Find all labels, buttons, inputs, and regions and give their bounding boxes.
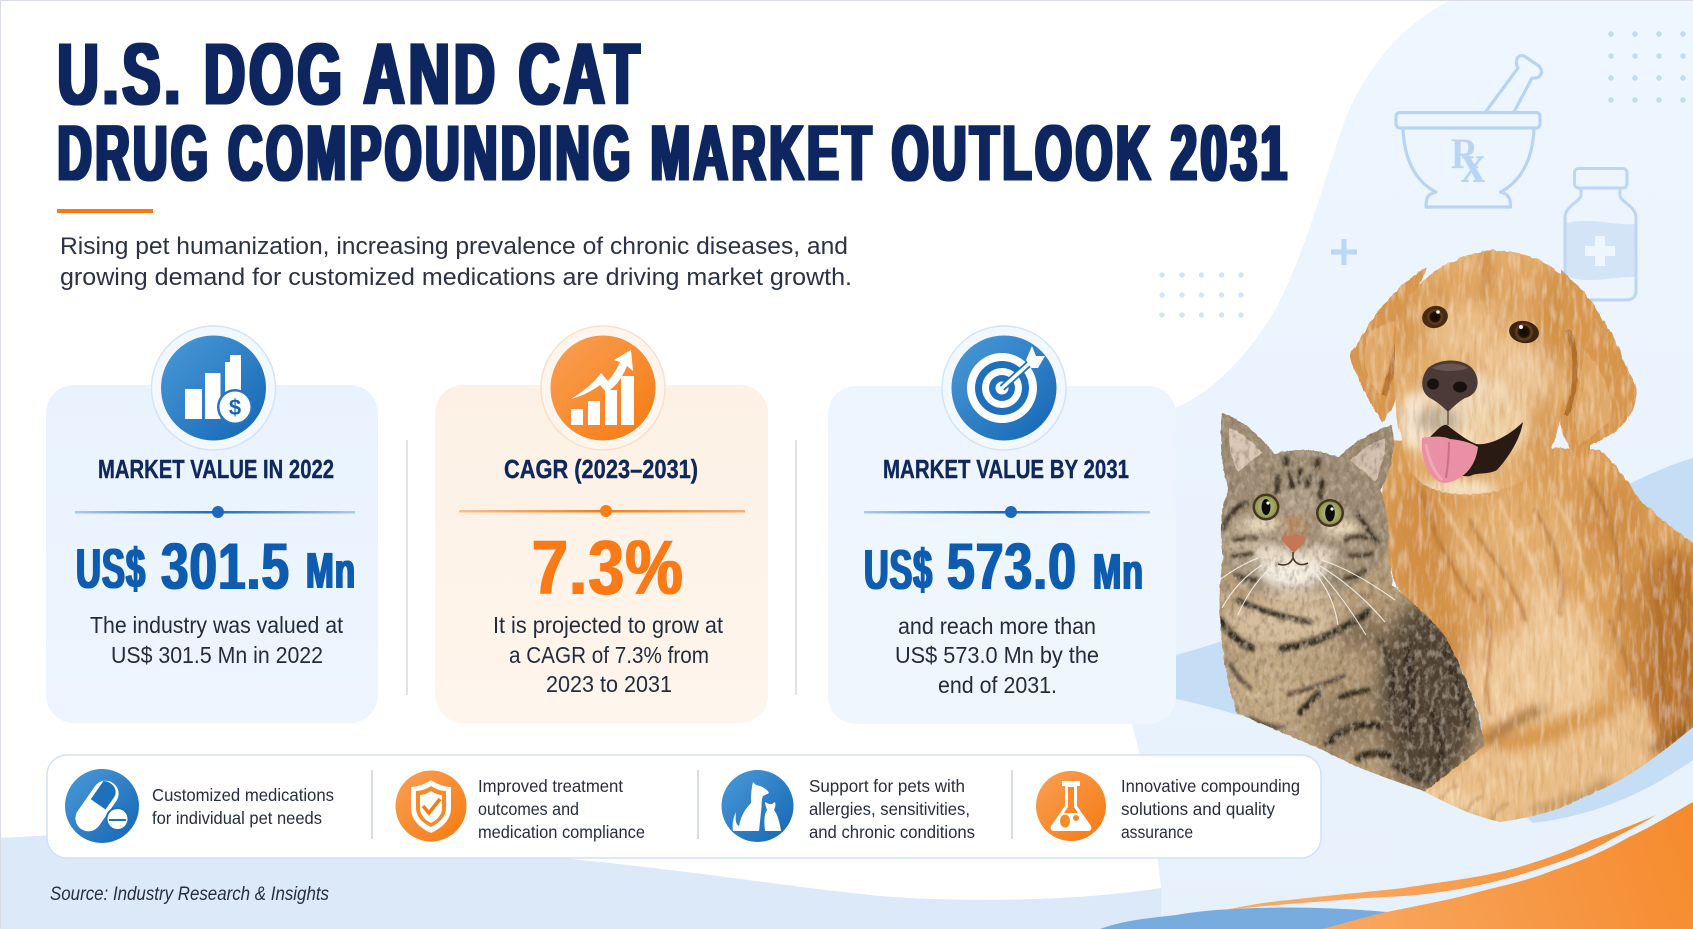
value [864, 529, 1144, 603]
cat face [1205, 494, 1395, 635]
subtitle: growing demand for customized medications are driving market growth. [60, 264, 852, 291]
value: 301.5 [161, 529, 290, 603]
icon: bar chart with dollar coin: $ [229, 395, 241, 420]
dot grid top right [1608, 31, 1686, 103]
dog face [1420, 303, 1541, 483]
value: US$ [864, 538, 933, 602]
icon: medicine bottle [1565, 168, 1636, 300]
divider with dot [459, 505, 745, 517]
benefit: improved outcomes [396, 770, 645, 842]
description: 2023 to 2031 [546, 671, 672, 697]
description: end of 2031. [938, 672, 1057, 698]
panel: CAGR [435, 326, 768, 723]
benefit: customized medications [65, 769, 334, 843]
icon: plus [1331, 239, 1357, 265]
text: medication compliance [478, 822, 645, 842]
text: Innovative compounding [1121, 776, 1300, 796]
title: U.S. DOG AND CAT [58, 26, 644, 123]
heading: MARKET VALUE BY 2031 [883, 454, 1129, 484]
cat ears [1221, 413, 1394, 495]
panel: market value by 2031 [828, 326, 1176, 724]
heading: CAGR (2023–2031) [504, 454, 698, 484]
benefit: innovative compounding [1036, 771, 1300, 842]
text: outcomes and [478, 799, 579, 819]
description: US$ 301.5 Mn in 2022 [111, 642, 323, 668]
dog [1350, 245, 1693, 850]
text: solutions and quality [1121, 799, 1275, 819]
dot grid middle [1159, 272, 1244, 318]
text: Improved treatment [478, 776, 623, 796]
dog right ear [1560, 270, 1637, 458]
dog left ear [1350, 267, 1427, 423]
text [152, 785, 334, 828]
panel: market value in 2022 [46, 326, 378, 723]
icon: target with arrow [942, 326, 1066, 450]
value: Mn [1093, 543, 1144, 600]
divider with dot [75, 506, 355, 518]
icon: shield with check [396, 770, 466, 842]
icon: dog and cat silhouette [722, 770, 794, 842]
icon: flask [1036, 771, 1106, 841]
title [58, 26, 1290, 197]
description [493, 612, 724, 697]
cat body [1219, 542, 1484, 792]
text: for individual pet needs [152, 808, 322, 828]
text [809, 776, 975, 842]
text: and chronic conditions [809, 822, 975, 842]
source note: Source: Industry Research & Insights [50, 884, 329, 905]
dog body [1382, 439, 1693, 822]
text: Customized medications [152, 785, 334, 805]
description: a CAGR of 7.3% from [509, 642, 709, 668]
cat [1205, 413, 1500, 810]
icon: bar chart with dollar coin [152, 326, 276, 450]
panel: benefits bar [47, 755, 1321, 858]
orange accent rule [57, 209, 153, 213]
text: allergies, sensitivities, [809, 799, 970, 819]
subtitle [60, 233, 852, 291]
description [895, 613, 1099, 698]
text [1121, 776, 1300, 842]
icon: mortar and pestle with Rx [1396, 56, 1541, 207]
description: The industry was valued at [90, 612, 344, 638]
icon: mortar and pestle with Rx: R [1451, 131, 1479, 178]
value: 7.3% [532, 525, 684, 611]
value: US$ [76, 537, 146, 601]
cat head [1220, 450, 1390, 603]
value: 573.0 [947, 529, 1077, 603]
text: assurance [1121, 822, 1193, 842]
photo: dog and cat [1205, 245, 1693, 850]
icon: capsule and tablet [65, 769, 139, 843]
value [76, 529, 356, 603]
dog head [1394, 249, 1568, 496]
text [478, 776, 645, 842]
description: It is projected to grow at [493, 612, 724, 638]
icon: growth chart arrow [541, 326, 665, 450]
text: Support for pets with [809, 776, 965, 796]
description [90, 612, 344, 668]
divider with dot [864, 506, 1150, 518]
heading: MARKET VALUE IN 2022 [98, 454, 334, 484]
dog fur strands [1420, 480, 1687, 822]
divider between cards [407, 440, 796, 695]
description: and reach more than [898, 613, 1096, 639]
benefit: support for pets [722, 770, 975, 842]
subtitle: Rising pet humanization, increasing prevalence of chronic diseases, and [60, 233, 848, 260]
value: Mn [306, 542, 356, 599]
icon: mortar and pestle with Rx: x [1461, 133, 1485, 195]
description: US$ 573.0 Mn by the [895, 642, 1099, 668]
cat tabby stripes [1220, 600, 1468, 780]
